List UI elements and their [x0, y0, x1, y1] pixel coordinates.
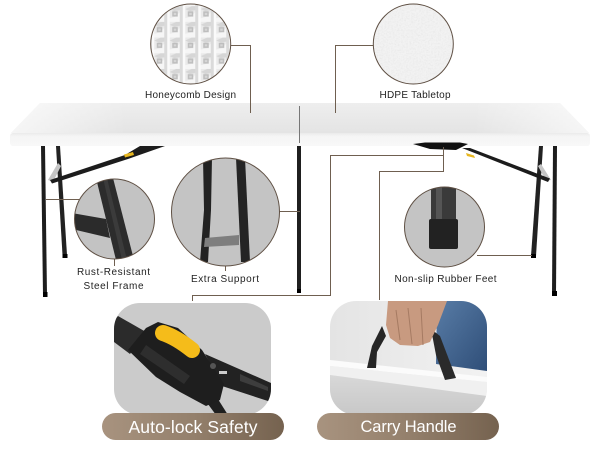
callout: HDPE tabletop: HDPE Tabletop — [380, 90, 451, 101]
photo: auto-lock mechanism — [114, 303, 271, 415]
photo: hand carrying table — [330, 301, 487, 415]
label pill — [317, 413, 499, 440]
callout: non-slip rubber feet: Non-slip Rubber Feet — [394, 274, 497, 285]
callout: extra support: Extra Support — [191, 274, 259, 285]
tabletop — [10, 103, 590, 146]
callout: extra support — [172, 158, 280, 285]
center hinge bracket — [413, 142, 468, 150]
panel: auto-lock safety — [102, 303, 284, 440]
label pill: Carry Handle — [360, 418, 456, 436]
center table leg — [297, 143, 301, 293]
label pill — [102, 413, 284, 440]
label pill: Auto-lock Safety — [128, 417, 258, 437]
callout: non-slip rubber feet — [394, 186, 497, 285]
callout: honeycomb design — [145, 4, 236, 101]
panel: carry handle — [317, 301, 499, 440]
connector lines — [46, 46, 532, 301]
callout: rust-resistant steel frame — [72, 178, 154, 292]
right table legs and brace — [462, 146, 557, 296]
left table legs and brace — [41, 146, 165, 297]
callout: honeycomb design: Honeycomb Design — [145, 90, 236, 101]
callout: rust-resistant steel frame: Steel Frame — [84, 281, 144, 292]
callout: rust-resistant steel frame: Rust-Resistant — [77, 267, 150, 278]
callout: HDPE tabletop — [373, 4, 454, 101]
